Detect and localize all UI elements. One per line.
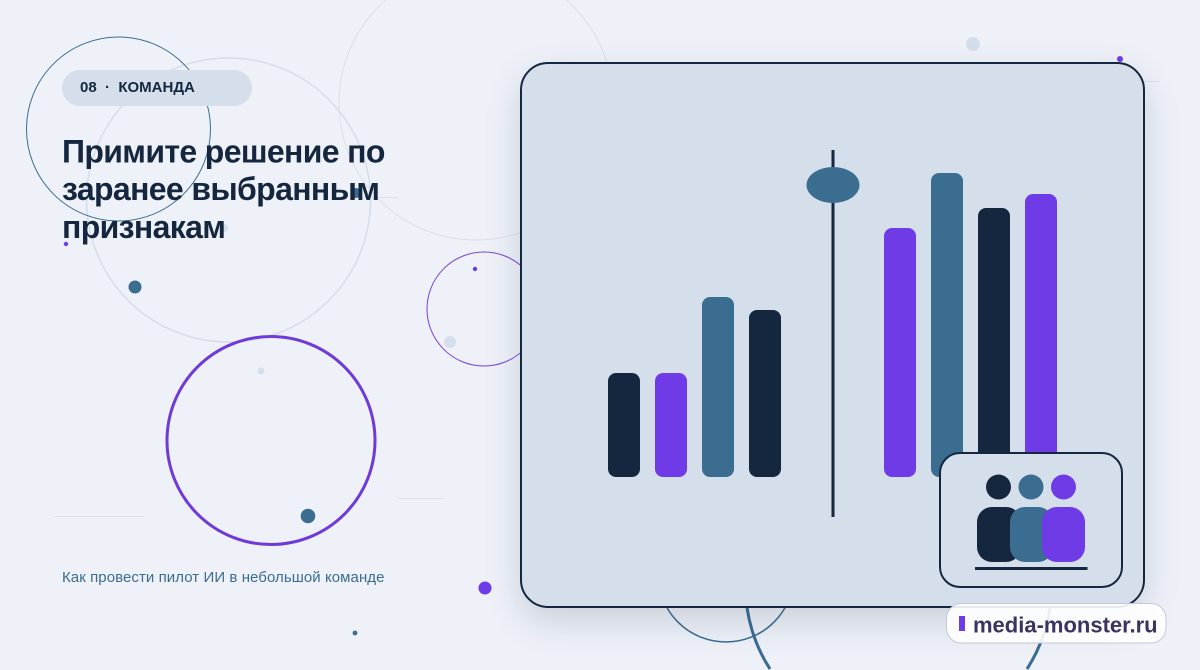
title: признакам <box>62 209 225 245</box>
subtitle: Как провести пилот ИИ в небольшой команде <box>62 569 385 586</box>
tag pill <box>62 70 252 106</box>
bar chart: right group <box>884 173 1057 477</box>
title: Примите решение по <box>62 134 385 170</box>
title: заранее выбранным <box>62 171 379 207</box>
panel: chart card <box>521 63 1144 607</box>
bar chart: left group <box>608 297 781 477</box>
divider with marker <box>806 150 860 517</box>
tag pill: 08 · КОМАНДА <box>80 79 195 96</box>
watermark badge: media-monster.ru <box>973 612 1158 638</box>
icon: team inset <box>940 453 1122 587</box>
watermark badge <box>946 604 1166 643</box>
card shadow <box>520 62 1145 608</box>
